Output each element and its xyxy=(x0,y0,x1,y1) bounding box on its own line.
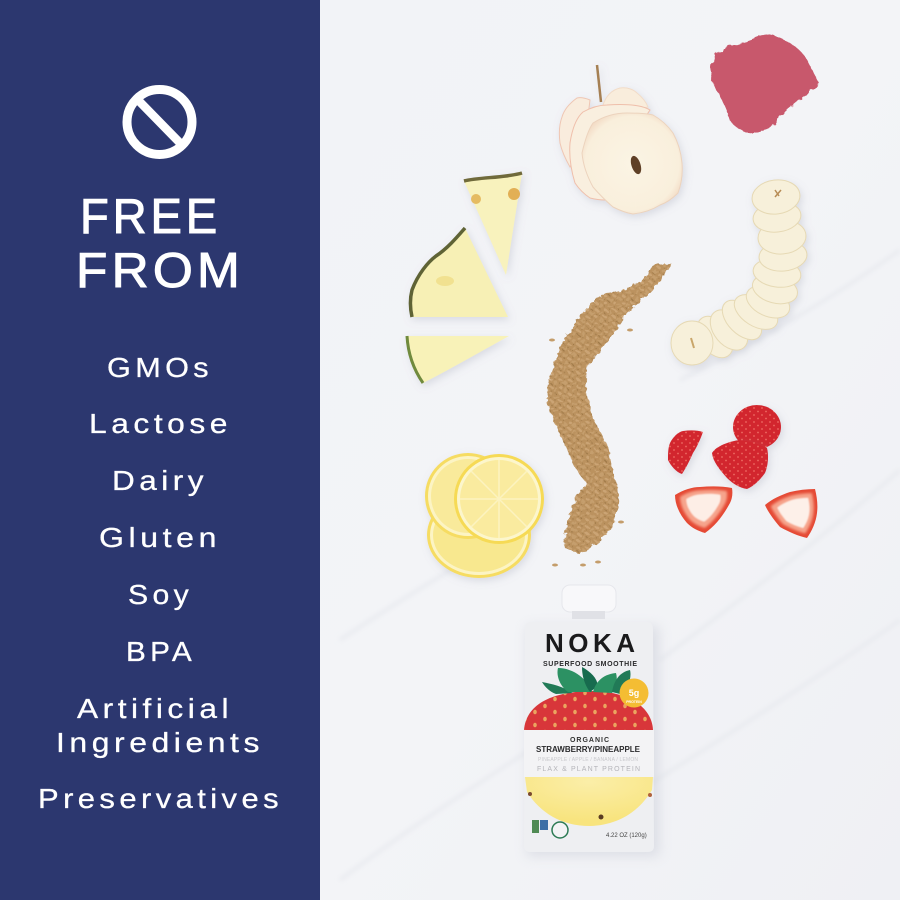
flavour label xyxy=(524,730,654,777)
pouch body xyxy=(524,622,654,852)
subtitle: SUPERFOOD SMOOTHIE xyxy=(543,661,637,668)
icon: prohibition sign xyxy=(127,90,192,154)
brand name: NOKA xyxy=(545,628,635,658)
strawberry band xyxy=(524,667,653,730)
pouch cap xyxy=(562,585,616,619)
flavour label: FLAX & PLANT PROTEIN xyxy=(537,766,640,773)
list: excluded ingredients: Lactose xyxy=(89,408,232,439)
pouch shadow xyxy=(527,626,659,856)
list: excluded ingredients: Ingredients xyxy=(56,727,264,758)
protein badge: PROTEIN xyxy=(626,700,642,704)
flax seeds xyxy=(547,264,672,566)
certification logos xyxy=(532,820,568,838)
list: excluded ingredients: Soy xyxy=(128,579,193,610)
panel: free from sidebar xyxy=(0,0,320,900)
flavour label: PINEAPPLE / APPLE / BANANA / LEMON xyxy=(538,757,638,763)
strawberries xyxy=(668,405,817,538)
list: excluded ingredients: Preservatives xyxy=(38,783,283,814)
flavour label: STRAWBERRY/PINEAPPLE xyxy=(536,745,641,754)
list: excluded ingredients: Dairy xyxy=(112,465,208,496)
list: excluded ingredients: BPA xyxy=(126,636,196,667)
heading: free from: FREE xyxy=(80,190,221,244)
pineapple band xyxy=(525,777,653,826)
list: excluded ingredients xyxy=(38,352,283,814)
heading: free from xyxy=(76,190,244,298)
marble background xyxy=(320,0,900,900)
net weight: 4.22 OZ (120g) xyxy=(606,833,647,839)
flavour label: ORGANIC xyxy=(570,737,609,744)
berry powder xyxy=(710,35,819,133)
apple slices xyxy=(559,65,682,214)
protein badge: 5g xyxy=(629,688,639,698)
pineapple wedges xyxy=(407,173,522,383)
product pouch xyxy=(524,585,659,856)
protein badge xyxy=(620,678,648,708)
lemon slices xyxy=(425,453,544,578)
list: excluded ingredients: Artificial xyxy=(77,693,233,724)
list: excluded ingredients: Gluten xyxy=(99,522,221,553)
list: excluded ingredients: GMOs xyxy=(107,352,213,383)
banana slices xyxy=(671,177,808,365)
heading: free from: FROM xyxy=(76,244,244,298)
